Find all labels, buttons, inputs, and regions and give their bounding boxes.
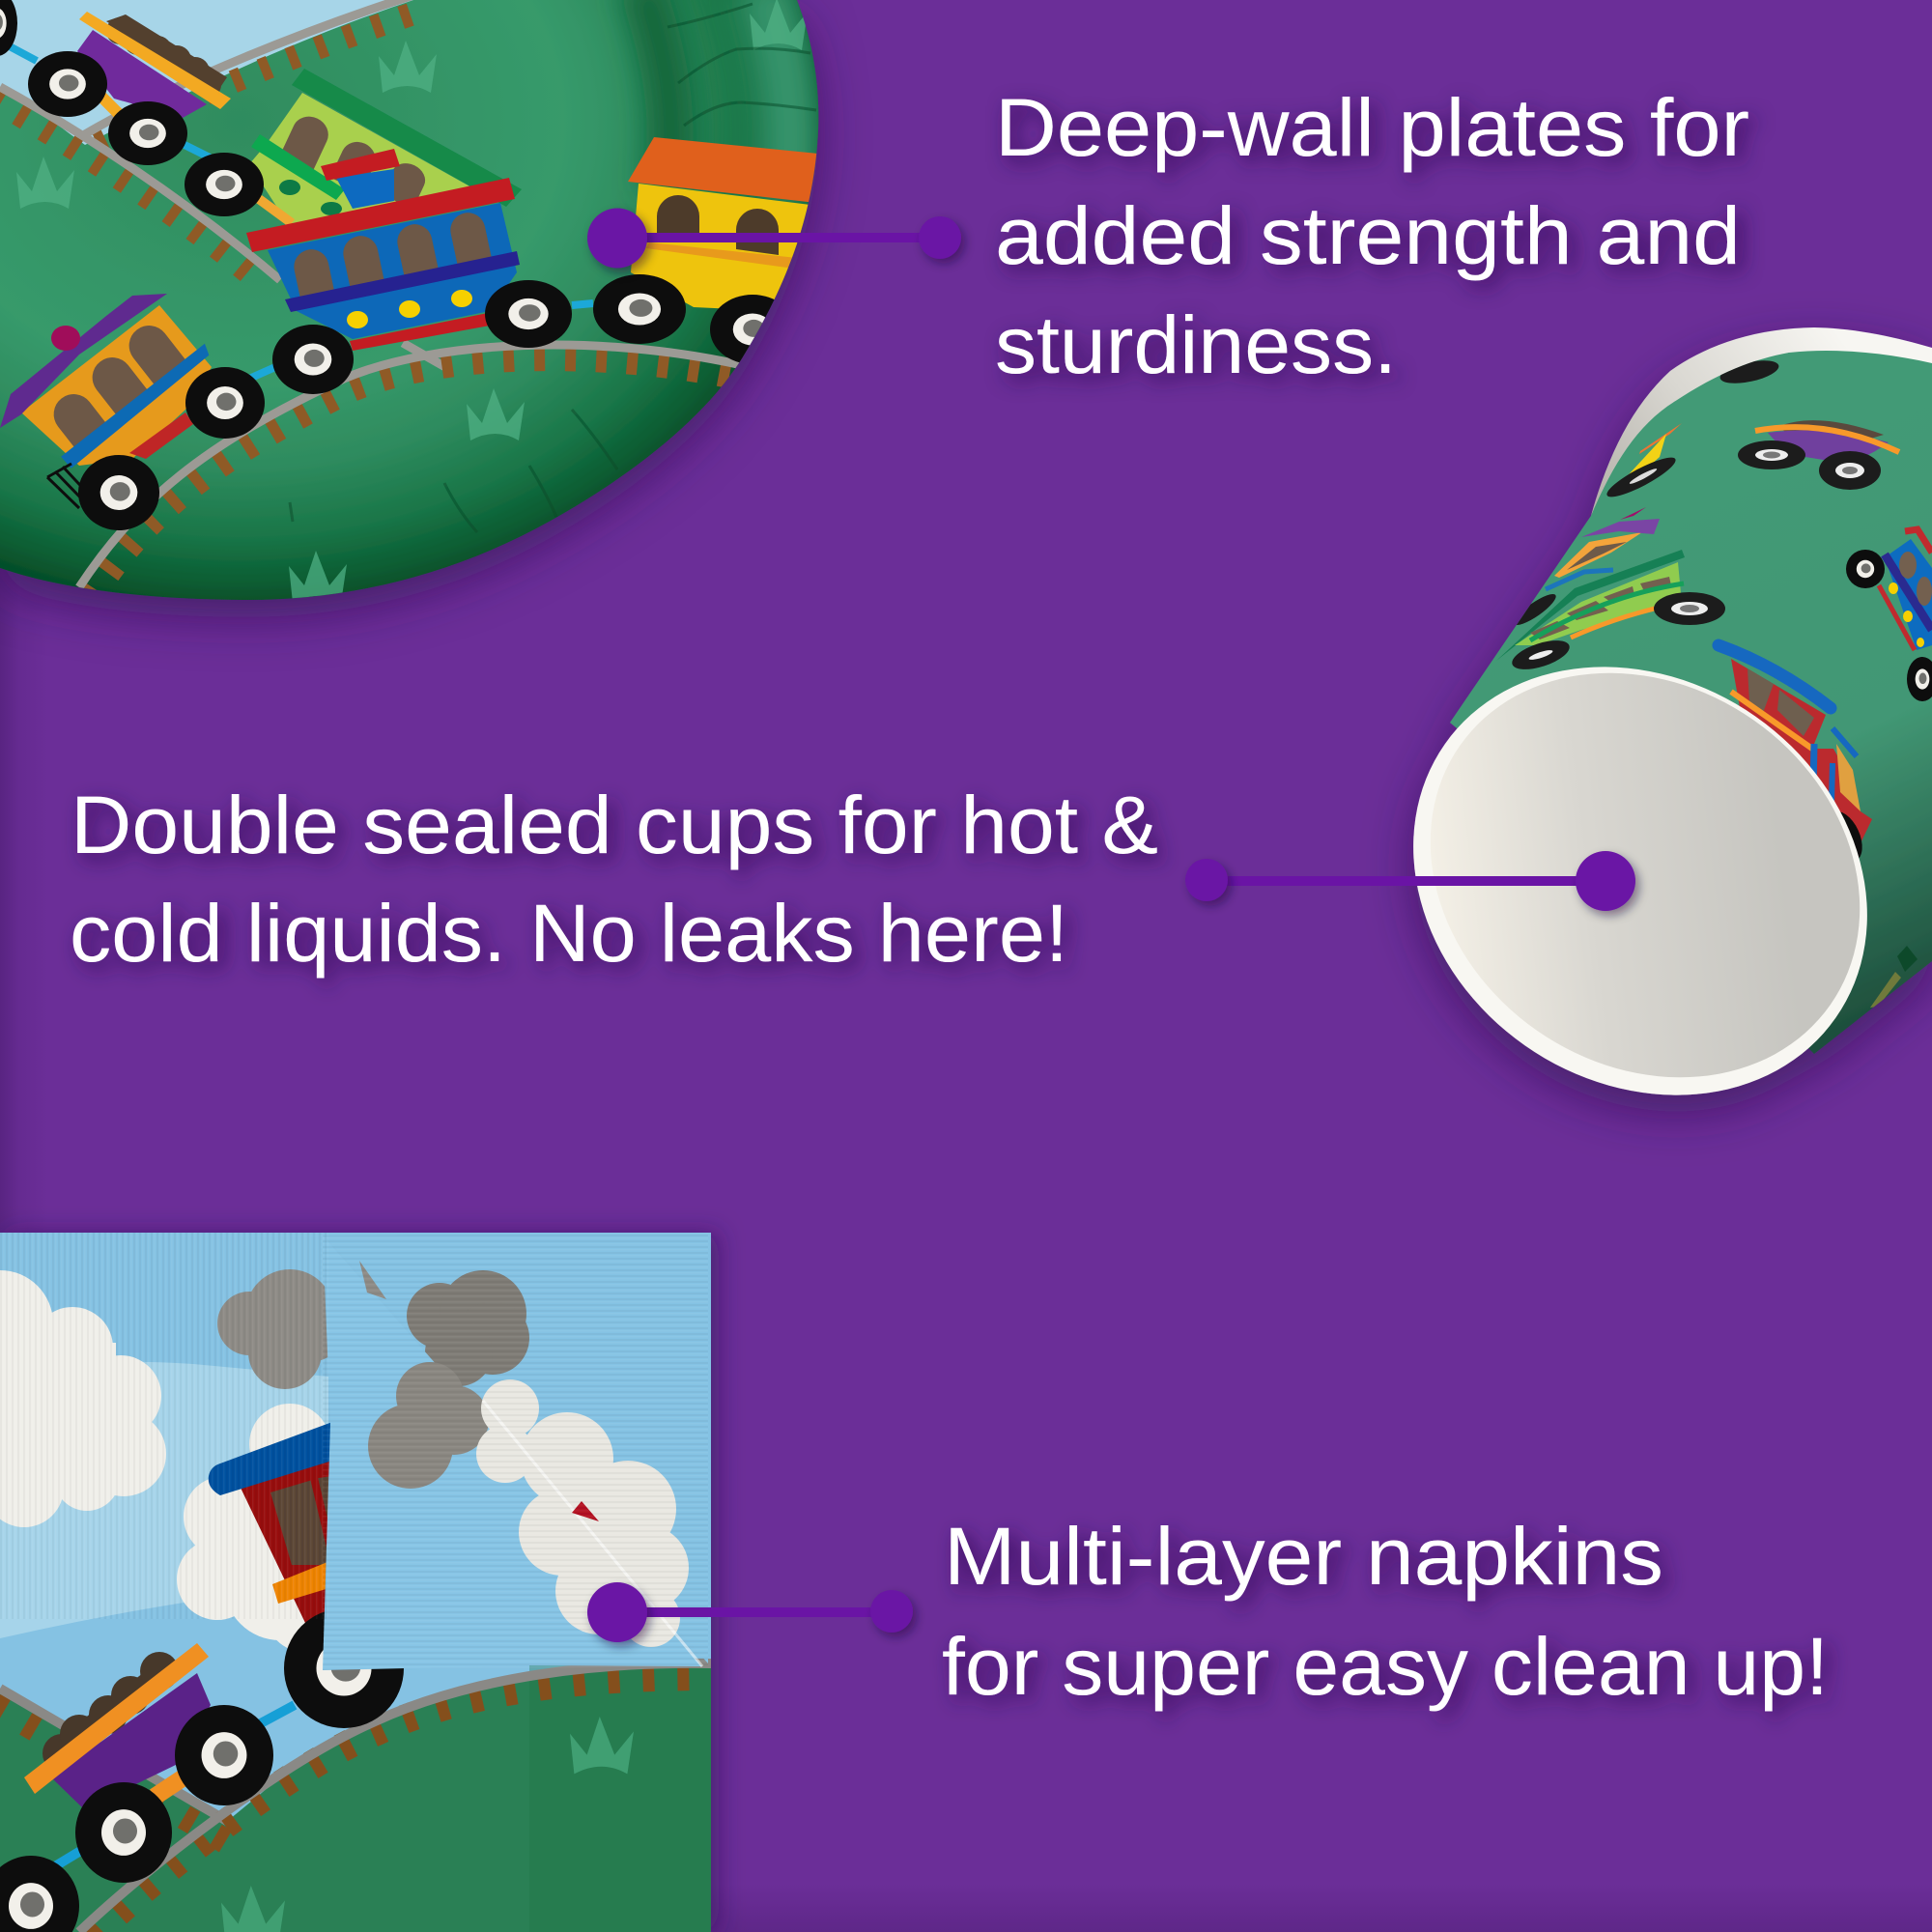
text: plate strength: sturdiness. xyxy=(995,299,1397,390)
green car xyxy=(249,69,522,227)
yellow car xyxy=(628,137,818,311)
cup base rim xyxy=(1329,580,1932,1182)
connectors xyxy=(8,45,593,379)
top wheel xyxy=(1719,356,1780,387)
white cloud on crease xyxy=(476,1379,689,1647)
light sky band xyxy=(0,1362,328,1638)
callout: napkin xyxy=(587,1582,913,1642)
callout: plate xyxy=(587,209,961,269)
text: cups: cold liquids. No leaks here! xyxy=(70,888,1068,979)
left hill track xyxy=(0,87,445,367)
plate wheels xyxy=(0,0,795,530)
plate base xyxy=(0,0,831,618)
grey smoke cloud xyxy=(217,1269,348,1389)
napkin wheels xyxy=(0,1705,273,1932)
orange car print xyxy=(1511,507,1660,630)
connectors xyxy=(50,1705,295,1869)
hill xyxy=(0,1663,711,1932)
napkin purple coal car xyxy=(24,1643,211,1809)
napkin red train car xyxy=(209,1422,332,1623)
text: napkins: for super easy clean up! xyxy=(942,1621,1829,1712)
text: cups: Double sealed cups for hot & xyxy=(71,780,1158,870)
flap emboss lines xyxy=(323,1232,708,1670)
napkin xyxy=(0,1232,713,1932)
red car print xyxy=(1719,645,1872,867)
sky wedge xyxy=(0,0,413,145)
text: plate strength xyxy=(995,82,1749,390)
napkin engine wheel xyxy=(284,1608,404,1728)
grey smoke on flap xyxy=(368,1362,489,1489)
blue car print xyxy=(1846,529,1932,701)
callout: cup xyxy=(1185,851,1635,911)
text: cups xyxy=(70,780,1158,979)
green car print xyxy=(1496,550,1725,675)
left track xyxy=(0,1689,232,1845)
orange car xyxy=(0,294,212,508)
cup rim xyxy=(1591,327,1932,516)
upper track xyxy=(85,0,425,143)
lower track xyxy=(79,345,744,599)
grey smoke upper xyxy=(407,1270,529,1386)
cup base xyxy=(1351,590,1932,1160)
plate illustration xyxy=(0,0,831,618)
text: plate strength: Deep-wall plates for xyxy=(995,82,1749,173)
grass tufts xyxy=(16,0,808,603)
left cloud xyxy=(0,1270,166,1527)
white cloud behind engine xyxy=(177,1404,343,1652)
purple coal car print xyxy=(1738,420,1899,490)
top-right underlying panel xyxy=(323,1232,708,1663)
yellow car print xyxy=(1603,423,1682,503)
blue engine car xyxy=(246,149,520,351)
folded flap xyxy=(323,1236,702,1670)
sky base xyxy=(0,1233,711,1932)
text: plate strength: added strength and xyxy=(995,190,1741,281)
flap smoke fragment xyxy=(359,1261,386,1299)
cup train prints xyxy=(1496,356,1932,1008)
napkin grass xyxy=(221,1717,634,1932)
right track xyxy=(79,1663,711,1932)
lower car fragment xyxy=(1870,946,1918,1008)
napkin emboss lines xyxy=(0,1233,328,1619)
red fragment xyxy=(572,1501,599,1521)
crease line xyxy=(483,1401,702,1666)
dark green fold band xyxy=(529,1663,713,1932)
paper cup xyxy=(1395,326,1932,1132)
cup body xyxy=(1450,351,1932,1054)
plate wall shading xyxy=(639,0,791,203)
coal car xyxy=(77,12,231,121)
plate wrinkles xyxy=(290,4,816,532)
text: napkins xyxy=(942,1511,1829,1712)
text: napkins: Multi-layer napkins xyxy=(944,1511,1663,1602)
